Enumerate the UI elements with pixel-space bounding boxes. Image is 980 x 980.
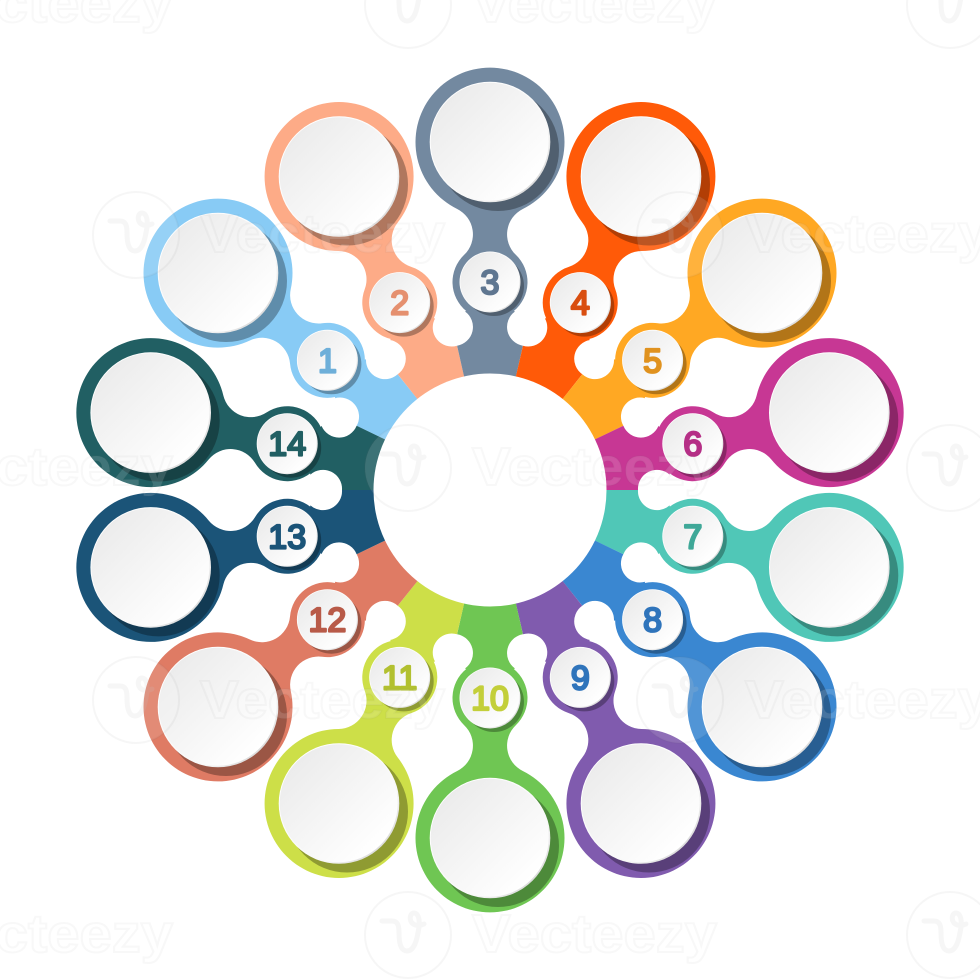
petal 12 small disc: [297, 589, 358, 650]
petal 11 large blank disc: [279, 743, 399, 864]
petal 10 large circle shadow: [437, 785, 559, 907]
petal 8 small disc: [622, 589, 683, 650]
petal 4 small disc: [550, 272, 611, 333]
petal 3 small circle shadow: [464, 256, 524, 316]
number 3: 3: [481, 264, 499, 302]
petal 2 small disc: [369, 272, 430, 333]
petal 5 large circle shadow: [709, 220, 831, 342]
petal 4 shape: [467, 77, 740, 430]
number 2: 2: [390, 285, 409, 323]
number 12: 12: [308, 602, 346, 640]
petal 11 small circle shadow: [374, 651, 434, 711]
petal 1 shape: [113, 168, 456, 484]
petal 9 large blank disc: [581, 743, 701, 864]
number 13: 13: [268, 518, 306, 556]
petal 1 large circle shadow: [165, 220, 287, 342]
number 5: 5: [643, 342, 662, 380]
watermark: Vecteezy: [472, 904, 717, 964]
petal 7 large circle shadow: [776, 514, 898, 636]
number 10: 10: [471, 680, 509, 718]
petal 7 shape: [573, 440, 918, 657]
petal 6: magenta: [573, 323, 918, 540]
number 1: 1: [318, 342, 337, 380]
petal 3 large circle shadow: [437, 89, 559, 211]
number 7: 7: [683, 518, 702, 556]
petal 12 shape: [113, 496, 456, 812]
petal 10 shape: [416, 592, 564, 912]
petal 2: peach: [240, 77, 513, 430]
number 8: 8: [643, 602, 662, 640]
petal 7 large blank disc: [769, 507, 890, 628]
petal 8 large blank disc: [702, 647, 822, 767]
petal 4 small circle shadow: [554, 277, 614, 337]
petal 14 small circle shadow: [261, 418, 321, 478]
petal 5 small circle shadow: [627, 334, 687, 394]
petal 14 small disc: [257, 413, 318, 474]
number 14: 14: [268, 426, 306, 464]
petal 14 large circle shadow: [98, 360, 220, 482]
petal 2 small circle shadow: [374, 277, 434, 337]
petal 6 small circle shadow: [667, 418, 727, 478]
petal 7: teal: [573, 440, 918, 657]
watermark: Vecteezy: [200, 670, 445, 730]
petal 9 small disc: [550, 647, 611, 708]
petal 3 large blank disc: [430, 82, 550, 202]
petal 6 large blank disc: [769, 352, 890, 473]
petal 12 large blank disc: [158, 647, 278, 767]
petal 1 small disc: [297, 330, 358, 391]
petal 2 shape: [240, 77, 513, 430]
petal 13: navy blue: [62, 440, 407, 657]
petal 3 shape: [416, 68, 564, 388]
petal 1: light blue: [113, 168, 456, 484]
petal 12 large circle shadow: [165, 654, 287, 776]
watermark: Vecteezy: [200, 204, 445, 264]
petal 6 small disc: [662, 413, 723, 474]
petal 6 large circle shadow: [776, 360, 898, 482]
petal 9 shape: [467, 550, 740, 903]
number 4: 4: [571, 285, 590, 323]
petal 10 large blank disc: [430, 778, 550, 898]
petal 2 large circle shadow: [286, 124, 408, 246]
petal 11 small disc: [369, 647, 430, 708]
petal 4 large circle shadow: [588, 124, 710, 246]
number 9: 9: [571, 659, 590, 697]
number 11: 11: [382, 659, 417, 697]
petal 9 large circle shadow: [588, 750, 710, 872]
petal 12 small circle shadow: [301, 594, 361, 654]
petal 5 shape: [524, 168, 867, 484]
petal 4 large blank disc: [581, 116, 701, 237]
petal 14 large blank disc: [90, 352, 211, 473]
petal 8: blue: [524, 496, 867, 812]
petal 10: green: [416, 592, 564, 912]
petal 5 small disc: [622, 330, 683, 391]
petal 10 small circle shadow: [464, 672, 524, 732]
petal 1 large blank disc: [158, 213, 278, 333]
petal 11 shape: [240, 550, 513, 903]
petal 6 shape: [573, 323, 918, 540]
petal 13 small circle shadow: [261, 510, 321, 570]
petal 4: orange-red: [467, 77, 740, 430]
petal 12: terracotta: [113, 496, 456, 812]
petal 5: amber: [524, 168, 867, 484]
petal 11: lime: [240, 550, 513, 903]
petal 8 shape: [524, 496, 867, 812]
petal 3 small disc: [460, 252, 520, 312]
petal 7 small disc: [662, 506, 723, 567]
petal 3: slate: [416, 68, 564, 388]
petal 13 small disc: [257, 506, 318, 567]
number 6: 6: [683, 426, 702, 464]
watermark: Vecteezy: [472, 437, 717, 497]
petal 14: dark teal: [62, 323, 407, 540]
petal 5 large blank disc: [702, 213, 822, 333]
watermark: Vecteezy: [745, 670, 980, 730]
petal 13 shape: [62, 440, 407, 657]
petal 13 large blank disc: [90, 507, 211, 628]
petal 13 large circle shadow: [98, 514, 220, 636]
petal 2 large blank disc: [279, 116, 399, 237]
petal 9: purple: [467, 550, 740, 903]
petal 10 small disc: [460, 668, 520, 728]
petal 8 large circle shadow: [709, 654, 831, 776]
petal 8 small circle shadow: [627, 594, 687, 654]
petal 1 small circle shadow: [301, 334, 361, 394]
petal 14 shape: [62, 323, 407, 540]
central white circle: [374, 374, 606, 606]
petal 9 small circle shadow: [554, 651, 614, 711]
petal 7 small circle shadow: [667, 510, 727, 570]
watermark: Vecteezy: [745, 204, 980, 264]
petal 11 large circle shadow: [286, 750, 408, 872]
